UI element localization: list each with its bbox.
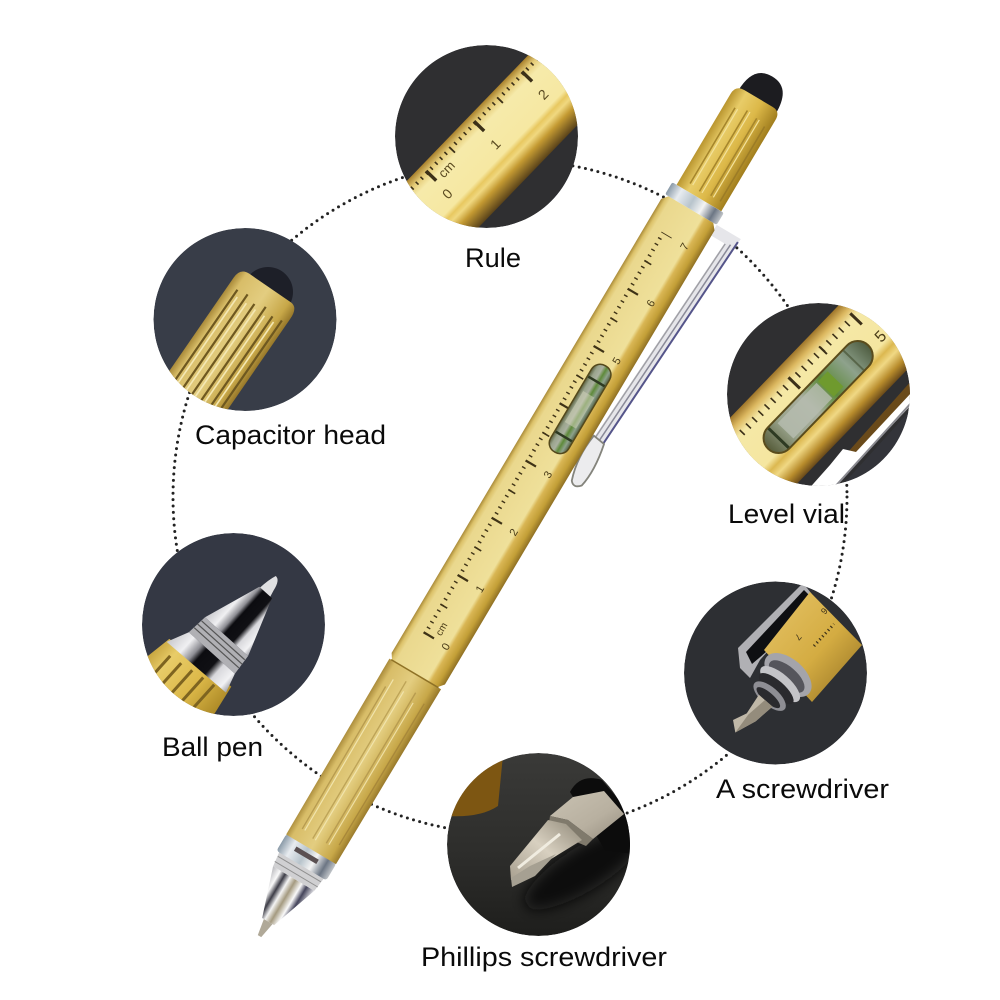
callout circle: slotted screwdriver: 6 bbox=[819, 606, 830, 616]
pen clip bbox=[565, 225, 741, 494]
ruler numbers: 7 bbox=[678, 241, 692, 253]
callout circle: rule: 2 bbox=[535, 86, 552, 103]
label: Phillips screwdriver: Phillips screwdriver bbox=[421, 942, 667, 972]
lower ribbed grip bbox=[285, 659, 441, 865]
label: Level vial: Level vial bbox=[728, 499, 845, 529]
label: Capacitor head: Capacitor head bbox=[195, 420, 386, 450]
callout circle: rule: 0 bbox=[439, 185, 456, 202]
ruler numbers: 2 bbox=[507, 527, 521, 538]
ruler numbers: 3 bbox=[542, 469, 555, 481]
ruler numbers: 5 bbox=[610, 355, 624, 367]
stylus rubber tip bbox=[738, 65, 791, 113]
callout circle: rule bbox=[395, 45, 578, 228]
upper ribbed grip bbox=[677, 85, 781, 211]
ruler ticks bbox=[425, 233, 667, 636]
callout circle: level vial: 5 bbox=[872, 328, 890, 346]
callout circle: rule: 1 bbox=[487, 136, 504, 152]
hexagonal ruler barrel bbox=[389, 194, 718, 690]
ruler numbers: 6 bbox=[645, 298, 658, 309]
ruler numbers: cm bbox=[434, 621, 450, 638]
label: Ball pen: Ball pen bbox=[162, 732, 263, 762]
level vial window bbox=[546, 361, 615, 457]
ruler numbers: 0 bbox=[440, 641, 453, 653]
callout circle: slotted screwdriver bbox=[684, 582, 867, 764]
callout circle: rule: cm bbox=[435, 158, 458, 181]
ruler numbers: 1 bbox=[474, 584, 487, 595]
callout circle: slotted screwdriver: 7 bbox=[793, 632, 804, 642]
main multi-tool pen bbox=[233, 60, 820, 966]
label: A screwdriver: A screwdriver bbox=[716, 774, 889, 804]
ball pen tip bbox=[235, 834, 337, 951]
chrome ring bbox=[665, 182, 724, 225]
label: Rule: Rule bbox=[465, 243, 521, 273]
callout circle: Phillips screwdriver bbox=[447, 753, 630, 936]
callout circle: level vial bbox=[727, 303, 910, 486]
callout circle: capacitor head bbox=[154, 228, 336, 411]
dotted ring connecting the callouts bbox=[173, 160, 847, 834]
ruler numbers bbox=[429, 234, 692, 653]
callout circle: ball pen bbox=[142, 533, 325, 716]
